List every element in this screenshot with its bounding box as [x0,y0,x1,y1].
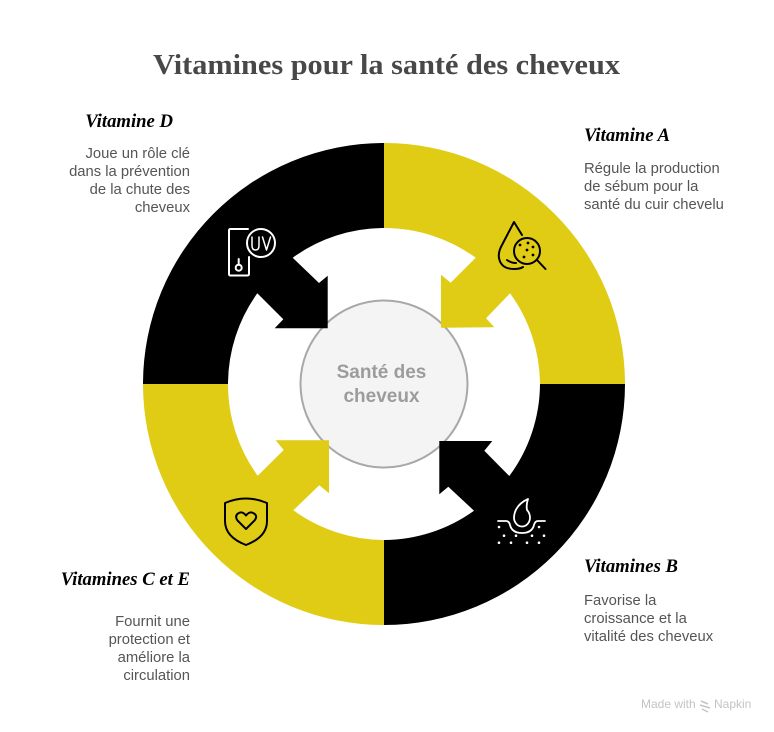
text block: Vitamine D: cheveux [135,200,191,216]
central circle: Santé des cheveux [300,300,468,468]
watermark: Made with Napkin: Napkin [714,697,751,711]
text block: Vitamines B: croissance et la [584,611,688,627]
text block: Vitamine A [584,125,724,213]
text block: Vitamines C et E: protection et [109,632,190,648]
central circle: Santé des cheveux: Santé des [337,362,426,383]
segment: Vitamines C et E arc with arrow [143,384,384,625]
text block: Vitamines C et E: améliore la [118,650,191,666]
segment: Vitamine D arc with arrow [143,143,384,384]
watermark: Made with Napkin: Made with [641,697,696,711]
text block: Vitamines B [584,556,714,645]
text block: Vitamines B: vitalité des cheveux [584,629,714,645]
text block: Vitamine D: dans la prévention [69,164,190,180]
text block: Vitamine A: Vitamine A [584,125,670,146]
text block: Vitamine D: de la chute des [90,182,190,198]
watermark: Made with Napkin [641,697,751,712]
central circle: Santé des cheveux: cheveux [343,386,420,407]
text block: Vitamines C et E: Vitamines C et E [61,569,190,590]
text block: Vitamine D: Vitamine D [85,111,173,132]
text block: Vitamines C et E: Fournit une [115,614,190,630]
icon: UV lamp [229,229,275,276]
icon: oil drop with magnifier [499,222,546,269]
text block: Vitamine A: santé du cuir chevelu [584,197,724,213]
segment: Vitamines B arc with arrow [384,384,625,625]
text block: Vitamine D [69,111,191,216]
text block: Vitamines C et E: circulation [123,668,190,684]
title: Vitamines pour la santé des cheveux [153,50,621,81]
text block: Vitamines B: Favorise la [584,593,657,609]
text block: Vitamines B: Vitamines B [584,556,678,577]
segment: Vitamine A arc with arrow [384,143,625,384]
text block: Vitamine D: Joue un rôle clé [86,146,190,162]
icon: hair follicle droplet [498,499,545,544]
text block: Vitamine A: de sébum pour la [584,179,699,195]
icon: shield with heart [225,498,267,545]
text block: Vitamines C et E [61,569,191,684]
text block: Vitamine A: Régule la production [584,161,720,177]
